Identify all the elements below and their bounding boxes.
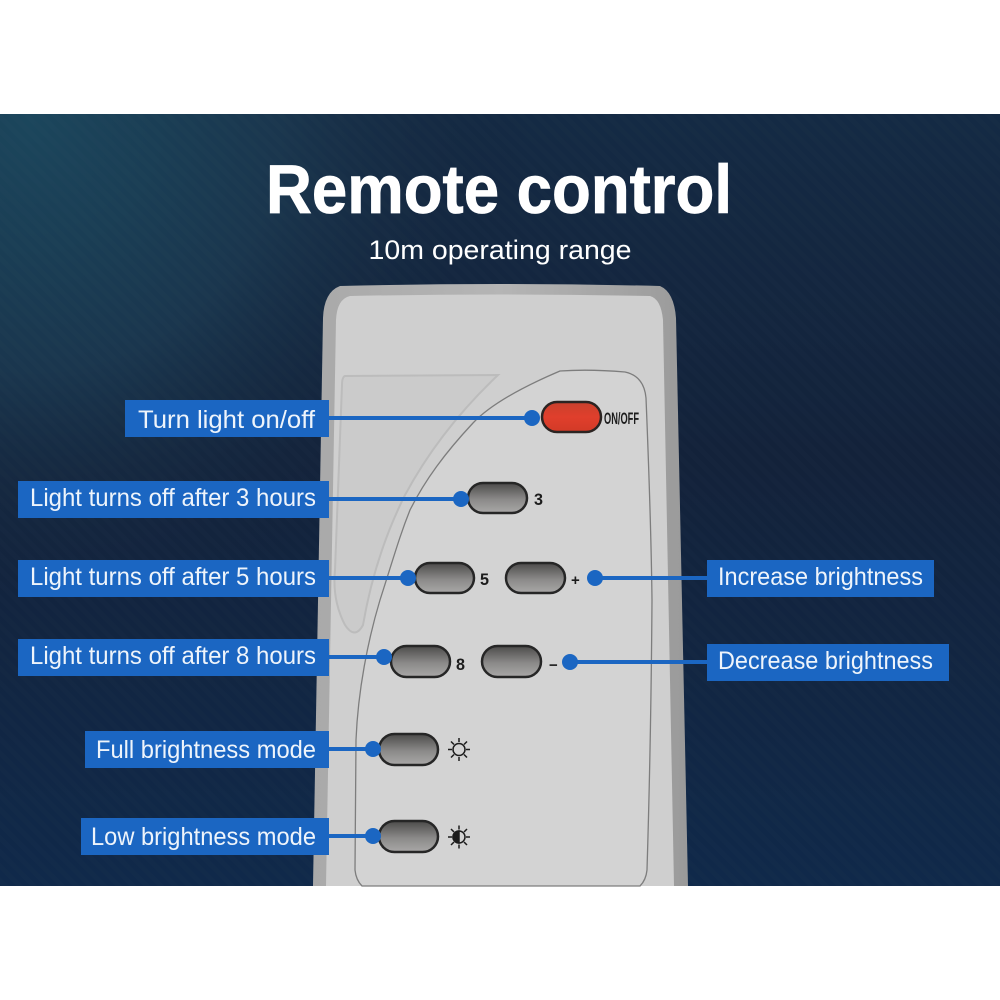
callout: off after 5 hours: Light turns off after 5 hours <box>30 563 316 591</box>
callout: increase brightness: Increase brightness <box>718 563 923 591</box>
remote face <box>326 294 674 886</box>
remote outer shell <box>313 284 688 886</box>
callout: off after 8 hours <box>18 639 392 676</box>
label: 3: 3 <box>534 490 543 509</box>
callout: off after 3 hours: Light turns off after 3 hours <box>30 484 316 512</box>
button: 5 hours <box>415 563 474 593</box>
callout: turn light on/off: Turn light on/off <box>138 406 315 434</box>
callout: decrease brightness <box>562 644 949 681</box>
button: 8 hours <box>391 646 450 677</box>
remote control <box>313 284 688 886</box>
icon: half sun <box>448 826 470 848</box>
background panel <box>0 114 1000 886</box>
label: 8: 8 <box>456 655 465 674</box>
callout: full brightness mode <box>85 731 381 768</box>
label: 5: 5 <box>480 570 489 589</box>
title: Remote control <box>266 151 732 228</box>
button: plus <box>506 563 565 593</box>
label: plus: + <box>571 572 580 589</box>
recessed wedge <box>334 375 498 632</box>
button: on/off <box>542 402 601 432</box>
callout: turn light on/off <box>125 400 540 437</box>
callout: full brightness mode: Full brightness mode <box>96 736 316 764</box>
button: full brightness <box>379 734 438 765</box>
callout: decrease brightness: Decrease brightness <box>718 647 933 675</box>
button: 3 hours <box>468 483 527 513</box>
button: low brightness <box>379 821 438 852</box>
icon: full sun <box>448 738 470 761</box>
callout: off after 3 hours <box>18 481 469 518</box>
subtitle: 10m operating range <box>368 235 632 265</box>
button: minus <box>482 646 541 677</box>
callout: off after 8 hours: Light turns off after 8 hours <box>30 642 316 670</box>
callout: increase brightness <box>587 560 934 597</box>
button panel <box>355 370 652 886</box>
callout: low brightness mode: Low brightness mode <box>91 823 316 851</box>
label: minus: − <box>549 657 558 674</box>
label: on/off: ON/OFF <box>604 409 639 428</box>
callout: low brightness mode <box>81 818 381 855</box>
callout: off after 5 hours <box>18 560 416 597</box>
